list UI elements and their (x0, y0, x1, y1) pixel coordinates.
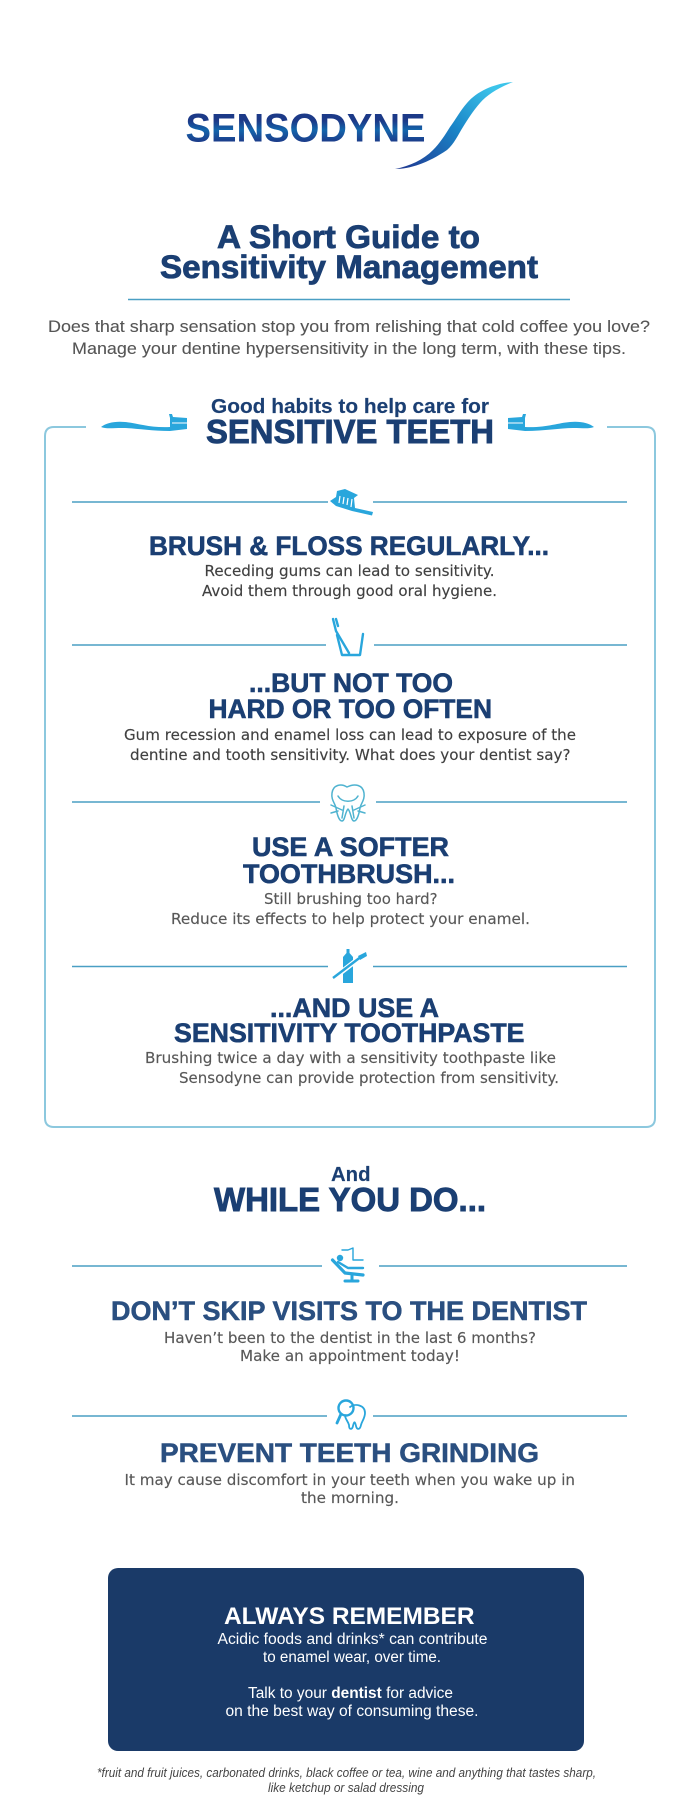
tip 2: dentine and tooth sensitivity. What does your dentist say? (130, 746, 570, 764)
tip 1: BRUSH & FLOSS REGULARLY... (149, 531, 549, 561)
footnote (97, 1765, 596, 1795)
panel heading: ALWAYS REMEMBER (224, 1603, 474, 1630)
tip 6: It may cause discomfort in your teeth when you wake up in (124, 1471, 575, 1489)
tip 4: Sensodyne can provide protection from sensitivity. (179, 1069, 559, 1087)
tip 5 (111, 1296, 588, 1365)
icon: tooth and magnifier (337, 1400, 365, 1429)
icon: toothbrush (330, 489, 373, 516)
tip 2: HARD OR TOO OFTEN (208, 694, 492, 724)
icon: dental chair (332, 1248, 363, 1281)
footnote: like ketchup or salad dressing (268, 1780, 425, 1795)
intro text (48, 317, 650, 358)
tip 6 (124, 1438, 575, 1507)
divider with glass icon (72, 619, 627, 655)
section heading: while you do: And (331, 1164, 370, 1186)
tip 5: DON’T SKIP VISITS TO THE DENTIST (111, 1296, 588, 1326)
tip 3: Still brushing too hard? (264, 890, 438, 908)
section heading: good habits: SENSITIVE TEETH (206, 413, 494, 450)
panel frame (45, 427, 655, 1127)
tip 4: ...AND USE A (270, 993, 439, 1023)
intro text: Does that sharp sensation stop you from relishing that cold coffee you love? (48, 317, 650, 336)
logo: Sensodyne: SENSODYNE (186, 106, 426, 150)
divider with dental chair icon (72, 1248, 627, 1281)
icon: left toothbrush (101, 414, 187, 431)
tip 6: PREVENT TEETH GRINDING (160, 1438, 539, 1468)
divider with toothbrush icon (72, 489, 627, 516)
tip 2: ...BUT NOT TOO (249, 668, 453, 698)
section heading: while you do: WHILE YOU DO... (214, 1181, 486, 1218)
title (160, 219, 538, 285)
tip 5: Make an appointment today! (240, 1347, 460, 1365)
icon: toothpaste and brush (331, 949, 367, 983)
section heading: good habits: Good habits to help care for (211, 396, 489, 418)
tip 4: Brushing twice a day with a sensitivity toothpaste like (145, 1049, 556, 1067)
tip 3 (171, 832, 530, 928)
tip 3: TOOTHBRUSH... (243, 859, 455, 889)
intro text: Manage your dentine hypersensitivity in the long term, with these tips. (72, 339, 626, 358)
tip 2: Gum recession and enamel loss can lead to exposure of the (124, 726, 576, 744)
title: Sensitivity Management (160, 249, 538, 285)
panel text: on the best way of consuming these. (226, 1703, 478, 1720)
section heading: good habits (206, 396, 494, 450)
icon: tooth with brush (331, 785, 365, 821)
tip 3: USE A SOFTER (252, 832, 449, 862)
panel: always remember (108, 1568, 584, 1751)
tip 4: SENSITIVITY TOOTHPASTE (174, 1018, 524, 1048)
divider with tooth and magnifier icon (72, 1400, 627, 1429)
icon: right toothbrush (508, 414, 594, 431)
tip 5: Haven’t been to the dentist in the last 6 months? (164, 1329, 536, 1347)
divider with tooth icon (72, 785, 627, 821)
tip 4 (145, 993, 559, 1087)
tip 6: the morning. (301, 1489, 399, 1507)
tip 3: Reduce its effects to help protect your enamel. (171, 910, 530, 928)
title: A Short Guide to (217, 219, 480, 255)
logo: Sensodyne (186, 82, 513, 169)
panel text (218, 1631, 487, 1720)
section heading: while you do (214, 1164, 486, 1218)
panel: good habits (45, 396, 655, 1127)
panel text: Acidic foods and drinks* can contribute (218, 1631, 487, 1648)
panel text: to enamel wear, over time. (263, 1649, 441, 1666)
tip 2 (124, 668, 576, 764)
footnote: *fruit and fruit juices, carbonated drinks, black coffee or tea, wine and anything that tastes sharp, (97, 1765, 596, 1780)
tip 1 (149, 531, 549, 600)
tip 1: Receding gums can lead to sensitivity. (204, 562, 494, 580)
panel text: Talk to your dentist for advice (248, 1685, 453, 1702)
icon: toothbrush in glass (333, 619, 363, 655)
divider with toothpaste icon (72, 949, 627, 983)
tip 1: Avoid them through good oral hygiene. (202, 582, 497, 600)
